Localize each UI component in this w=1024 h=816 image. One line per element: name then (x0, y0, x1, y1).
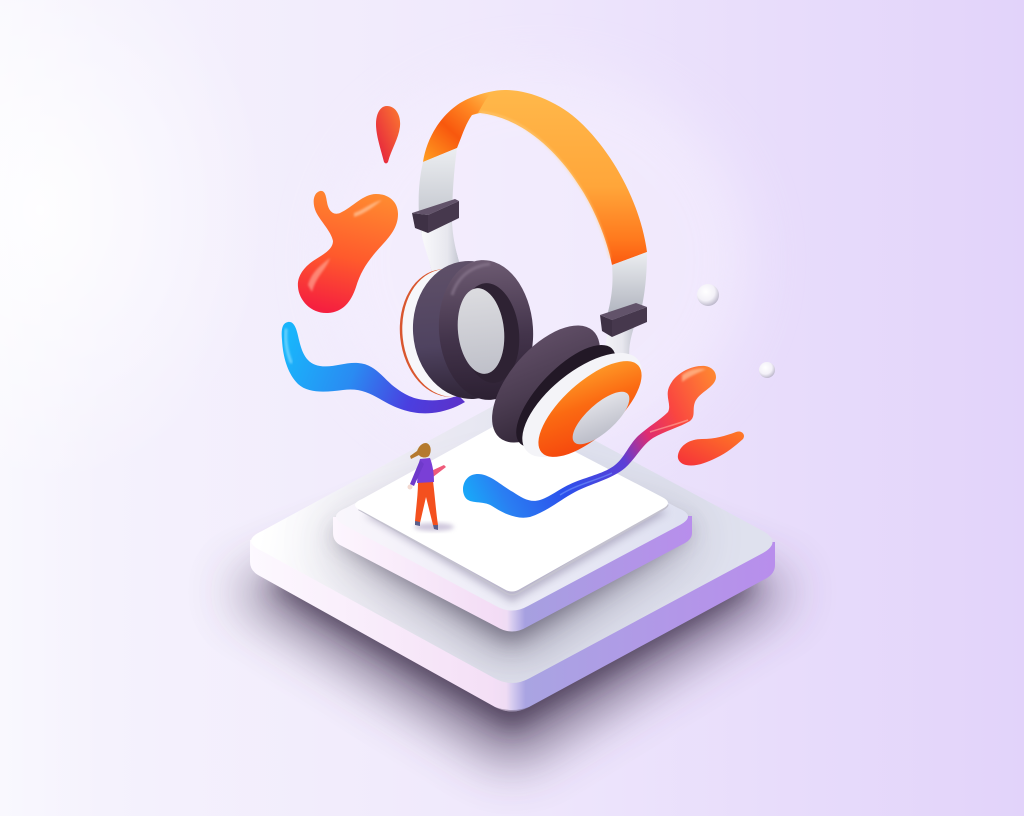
person figure (408, 443, 454, 531)
left bracket (412, 199, 459, 233)
headband: left red-orange end (423, 92, 492, 162)
legs (415, 481, 438, 525)
icon: small red blob (678, 432, 744, 466)
right cushion (472, 307, 631, 462)
feet (415, 521, 438, 530)
hair and head (410, 443, 431, 459)
left strut (419, 148, 459, 275)
headband: orange (470, 90, 647, 265)
platform: bottom tier (250, 400, 775, 712)
right strut (595, 252, 647, 368)
icon: red droplet (376, 106, 400, 164)
right earcup centre disc (565, 384, 637, 452)
left arm (410, 460, 424, 486)
icon: liquid stream right (463, 366, 716, 518)
icon: white sphere small (759, 362, 775, 378)
right arm (431, 465, 446, 477)
right bracket (600, 303, 647, 337)
torso (417, 458, 434, 483)
platform shadow (230, 480, 795, 765)
right earcup shell (505, 334, 659, 476)
right earcup orange ring (524, 345, 656, 473)
icon: large red-orange blob (298, 191, 398, 313)
left cushion (408, 257, 538, 403)
icon: white sphere large (697, 284, 719, 306)
platform: middle tier (333, 503, 692, 632)
icon: blue liquid stream left (282, 322, 465, 413)
icon: headphones (394, 90, 659, 476)
platform: top white tier (355, 421, 668, 596)
left earcup shell (394, 264, 502, 402)
headband highlight (480, 112, 610, 258)
